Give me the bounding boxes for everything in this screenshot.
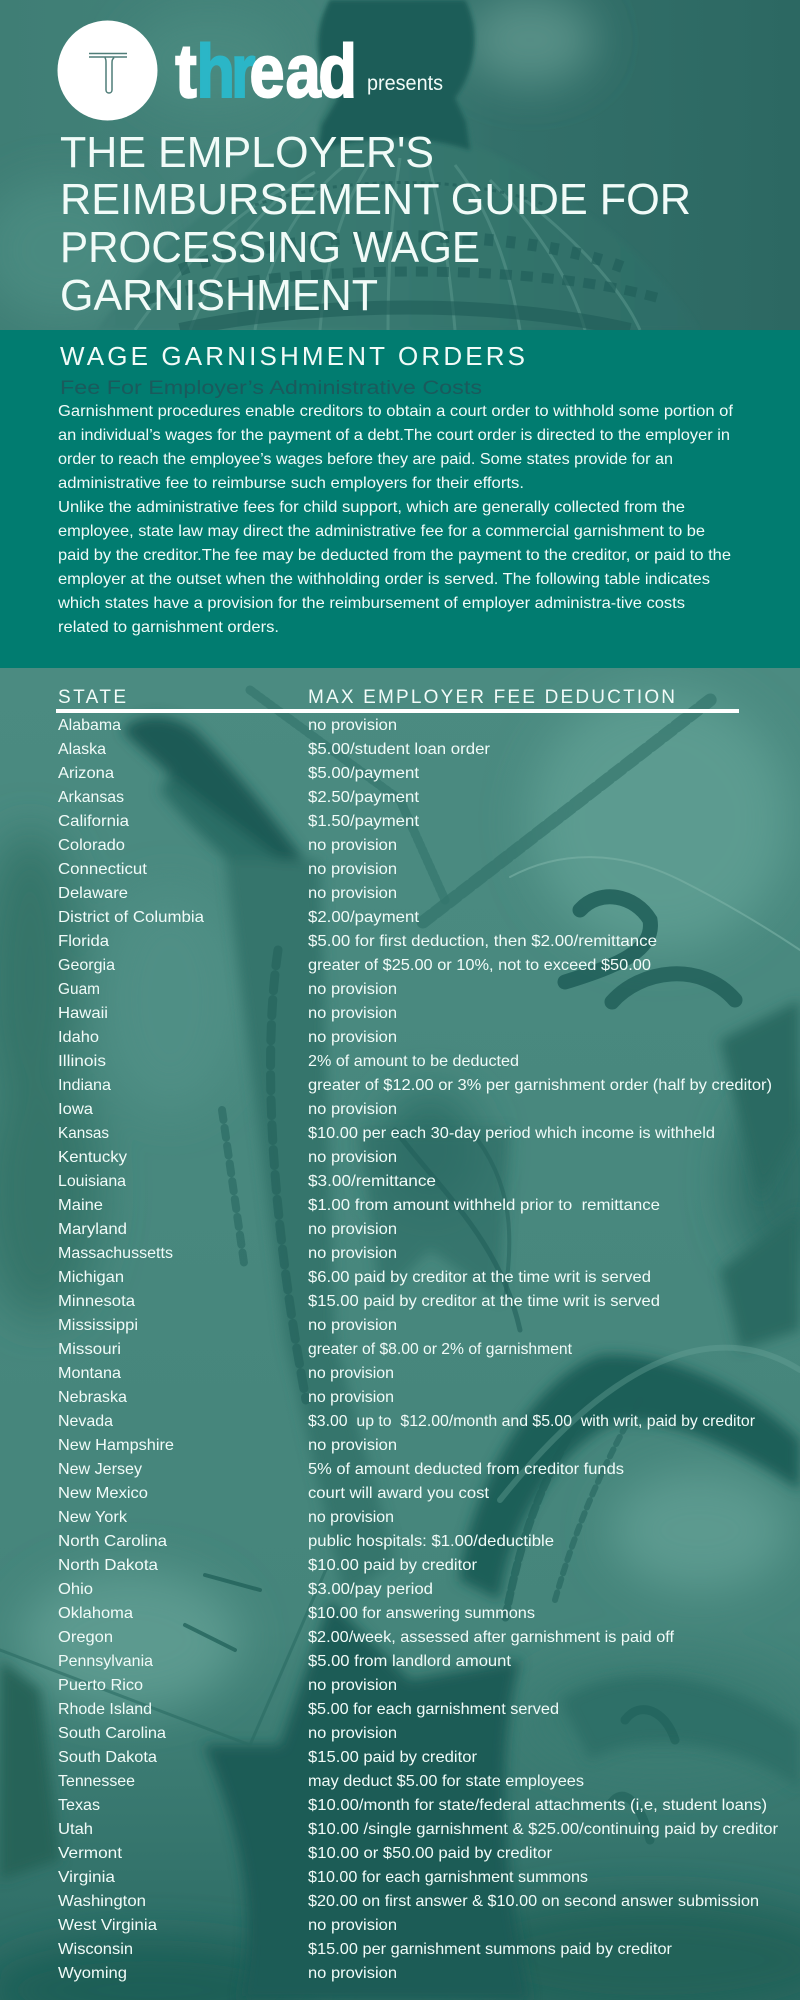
row: Florida: $5.00 for first deduction, then $2.00/remittance xyxy=(308,933,657,950)
row: Georgia: Georgia xyxy=(58,957,115,974)
row: District of Columbia: District of Columbia xyxy=(58,909,204,926)
row: Maryland: Maryland xyxy=(58,1221,127,1238)
subheading: administrative costs: Fee For Employer’s Administrative Costs xyxy=(60,378,482,399)
table header: max employer fee deduction: MAX EMPLOYER FEE DEDUCTION xyxy=(308,687,675,708)
row: Colorado xyxy=(58,837,397,854)
row: Kentucky: Kentucky xyxy=(58,1149,127,1166)
row: North Dakota: North Dakota xyxy=(58,1557,158,1574)
row: New Jersey xyxy=(58,1461,624,1478)
row: Maine: Maine xyxy=(58,1197,103,1214)
row: Colorado: no provision xyxy=(308,837,397,854)
row: Delaware xyxy=(58,885,397,902)
intro text block: Garnishment procedures enable creditors to obtain a court order to withhold some portion of xyxy=(58,403,734,420)
row: Nebraska xyxy=(58,1389,394,1406)
row: Alabama: no provision xyxy=(308,717,397,734)
intro text block: order to reach the employee’s wages before they are paid. Some states provide for an xyxy=(58,451,673,468)
row: Kentucky: no provision xyxy=(308,1149,397,1166)
row: Arizona xyxy=(58,765,420,782)
row: Puerto Rico: no provision xyxy=(308,1677,397,1694)
row: Wyoming: Wyoming xyxy=(58,1965,127,1982)
row: Missouri xyxy=(58,1341,573,1358)
row: Georgia xyxy=(58,957,651,974)
presents label: presents xyxy=(367,72,443,95)
intro text block: employer at the outset when the withholding order is served. The following table indicates xyxy=(58,571,710,588)
row: New Hampshire: no provision xyxy=(308,1437,397,1454)
row: Georgia: greater of $25.00 or 10%, not to exceed $50.00 xyxy=(308,957,651,974)
row: Missouri: greater of $8.00 or 2% of garnishment xyxy=(308,1341,573,1358)
row: Illinois xyxy=(58,1053,519,1070)
row: Nevada xyxy=(58,1413,756,1430)
row: New Hampshire xyxy=(58,1437,397,1454)
row: Alabama: Alabama xyxy=(58,717,121,734)
intro text block: which states have a provision for the reimbursement of employer administra-tive costs xyxy=(57,595,685,612)
row: Michigan: Michigan xyxy=(58,1269,124,1286)
row: North Carolina: public hospitals: $1.00/deductible xyxy=(308,1533,554,1550)
table: state fee rows xyxy=(58,717,779,1982)
row: Iowa: no provision xyxy=(308,1101,397,1118)
row: Iowa xyxy=(58,1101,397,1118)
title: GARNISHMENT xyxy=(60,271,378,320)
row: Vermont xyxy=(58,1845,553,1862)
row: Texas: $10.00/month for state/federal attachments (i,e, student loans) xyxy=(308,1797,767,1814)
row: Rhode Island xyxy=(58,1701,559,1718)
row: West Virginia xyxy=(58,1917,397,1934)
row: Idaho: no provision xyxy=(308,1029,397,1046)
row: Washington xyxy=(58,1893,759,1910)
row: New York: no provision xyxy=(308,1509,394,1526)
row: Minnesota: $15.00 paid by creditor at the time writ is served xyxy=(308,1293,660,1310)
row: Ohio xyxy=(58,1581,433,1598)
row: Vermont: $10.00 or $50.00 paid by creditor xyxy=(308,1845,553,1862)
intro text block: paid by the creditor.The fee may be deducted from the payment to the creditor, or paid to the xyxy=(58,547,731,564)
row: Washington: $20.00 on first answer & $10.00 on second answer submission xyxy=(308,1893,759,1910)
row: Delaware: Delaware xyxy=(58,885,128,902)
row: South Carolina xyxy=(58,1725,397,1742)
row: Kansas: $10.00 per each 30-day period which income is withheld xyxy=(308,1125,715,1142)
row: Utah xyxy=(58,1821,779,1838)
row: Arkansas: $2.50/payment xyxy=(308,789,420,806)
row: Alaska: Alaska xyxy=(58,741,106,758)
row: Arkansas: Arkansas xyxy=(58,789,124,806)
thread wordmark: e xyxy=(249,29,285,113)
row: Missouri: Missouri xyxy=(58,1341,121,1358)
row: Kansas: Kansas xyxy=(58,1125,109,1142)
row: Maine: $1.00 from amount withheld prior to remittance xyxy=(308,1197,660,1214)
row: New Jersey: New Jersey xyxy=(58,1461,142,1478)
intro text block: employee, state law may direct the administrative fee for a commercial garnishment to be xyxy=(58,523,705,540)
title: THE EMPLOYER'S xyxy=(60,128,434,177)
row: Virginia xyxy=(58,1869,588,1886)
row: Florida xyxy=(58,933,657,950)
row: New York xyxy=(58,1509,394,1526)
row: Connecticut: no provision xyxy=(308,861,397,878)
row: Virginia: $10.00 for each garnishment summons xyxy=(308,1869,588,1886)
thread wordmark: r xyxy=(231,29,256,113)
row: Guam xyxy=(58,981,397,998)
thread wordmark: h xyxy=(197,29,235,113)
row: Nebraska: Nebraska xyxy=(58,1389,127,1406)
row: Puerto Rico: Puerto Rico xyxy=(58,1677,143,1694)
row: Alabama xyxy=(58,717,397,734)
table header: state: STATE xyxy=(58,687,126,708)
row: Michigan xyxy=(58,1269,651,1286)
row: New Hampshire: New Hampshire xyxy=(58,1437,174,1454)
row: Oklahoma: Oklahoma xyxy=(58,1605,133,1622)
row: South Dakota: South Dakota xyxy=(58,1749,157,1766)
row: Utah: $10.00 /single garnishment & $25.00/continuing paid by creditor xyxy=(308,1821,779,1838)
row: Montana: no provision xyxy=(308,1365,394,1382)
row: Texas: Texas xyxy=(58,1797,100,1814)
row: Wisconsin xyxy=(58,1941,673,1958)
row: Michigan: $6.00 paid by creditor at the time writ is served xyxy=(308,1269,651,1286)
row: Pennsylvania: Pennsylvania xyxy=(58,1653,153,1670)
panel: wage garnishment orders xyxy=(0,330,800,668)
row: Arizona: $5.00/payment xyxy=(308,765,420,782)
row: Wyoming: no provision xyxy=(308,1965,397,1982)
row: Oregon: $2.00/week, assessed after garnishment is paid off xyxy=(308,1629,675,1646)
thread wordmark: a xyxy=(286,29,321,113)
row: South Dakota xyxy=(58,1749,478,1766)
row: Nevada: $3.00 up to $12.00/month and $5.00 with writ, paid by creditor xyxy=(308,1413,756,1430)
row: Nebraska: no provision xyxy=(308,1389,394,1406)
row: Washington: Washington xyxy=(58,1893,146,1910)
row: Maryland: no provision xyxy=(308,1221,397,1238)
row: Louisiana: Louisiana xyxy=(58,1173,126,1190)
row: Guam: Guam xyxy=(58,981,100,998)
intro text block: related to garnishment orders. xyxy=(58,619,279,636)
row: North Dakota xyxy=(58,1557,478,1574)
row: West Virginia: no provision xyxy=(308,1917,397,1934)
thread wordmark: t xyxy=(176,29,197,113)
title: PROCESSING WAGE xyxy=(60,223,480,272)
row: Tennessee xyxy=(58,1773,584,1790)
row: Pennsylvania xyxy=(58,1653,512,1670)
row: Puerto Rico xyxy=(58,1677,397,1694)
row: Hawaii xyxy=(58,1005,397,1022)
row: Kansas xyxy=(58,1125,715,1142)
row: Indiana xyxy=(58,1077,772,1094)
thread wordmark xyxy=(176,29,357,113)
row: New Mexico xyxy=(58,1485,490,1502)
row: Indiana: greater of $12.00 or 3% per garnishment order (half by creditor) xyxy=(308,1077,772,1094)
row: Alaska: $5.00/student loan order xyxy=(308,741,491,758)
row: North Carolina xyxy=(58,1533,554,1550)
row: Massachussetts xyxy=(58,1245,397,1262)
row: Wyoming xyxy=(58,1965,397,1982)
row: Arkansas xyxy=(58,789,420,806)
row: Rhode Island: $5.00 for each garnishment served xyxy=(308,1701,559,1718)
row: Illinois: 2% of amount to be deducted xyxy=(308,1053,519,1070)
row: Oklahoma xyxy=(58,1605,535,1622)
row: New Mexico: court will award you cost xyxy=(308,1485,490,1502)
row: Idaho xyxy=(58,1029,397,1046)
row: District of Columbia xyxy=(58,909,420,926)
intro text block xyxy=(57,403,734,636)
row: Connecticut xyxy=(58,861,397,878)
row: Massachussetts: Massachussetts xyxy=(58,1245,173,1262)
row: Mississippi xyxy=(58,1317,397,1334)
row: California xyxy=(58,813,420,830)
row: Connecticut: Connecticut xyxy=(58,861,148,878)
row: Montana xyxy=(58,1365,394,1382)
row: Tennessee: Tennessee xyxy=(58,1773,135,1790)
row: Illinois: Illinois xyxy=(58,1053,106,1070)
row: Rhode Island: Rhode Island xyxy=(58,1701,152,1718)
row: Mississippi: Mississippi xyxy=(58,1317,138,1334)
row: California: $1.50/payment xyxy=(308,813,420,830)
row: New York: New York xyxy=(58,1509,128,1526)
logo circle with T icon xyxy=(58,20,158,120)
row: Arizona: Arizona xyxy=(58,765,114,782)
row: Oregon: Oregon xyxy=(58,1629,113,1646)
row: Indiana: Indiana xyxy=(58,1077,111,1094)
row: Hawaii: Hawaii xyxy=(58,1005,108,1022)
row: Alaska xyxy=(58,741,491,758)
heading: wage garnishment orders: WAGE GARNISHMENT ORDERS xyxy=(60,341,525,371)
row: Iowa: Iowa xyxy=(58,1101,93,1118)
row: Maryland xyxy=(58,1221,397,1238)
intro text block: an individual’s wages for the payment of a debt.The court order is directed to the employer in xyxy=(58,427,730,444)
row: Vermont: Vermont xyxy=(58,1845,123,1862)
row: New Jersey: 5% of amount deducted from creditor funds xyxy=(308,1461,624,1478)
row: Nevada: Nevada xyxy=(58,1413,113,1430)
intro text block: Unlike the administrative fees for child support, which are generally collected from the xyxy=(58,499,685,516)
row: South Carolina: no provision xyxy=(308,1725,397,1742)
row: Oregon xyxy=(58,1629,675,1646)
row: Louisiana: $3.00/remittance xyxy=(308,1173,436,1190)
row: Louisiana xyxy=(58,1173,436,1190)
row: Ohio: $3.00/pay period xyxy=(308,1581,433,1598)
header background: capitol dome photo xyxy=(0,0,658,330)
row: Oklahoma: $10.00 for answering summons xyxy=(308,1605,535,1622)
row: Guam: no provision xyxy=(308,981,397,998)
row: Minnesota xyxy=(58,1293,660,1310)
row: Hawaii: no provision xyxy=(308,1005,397,1022)
row: Texas xyxy=(58,1797,767,1814)
row: South Dakota: $15.00 paid by creditor xyxy=(308,1749,478,1766)
intro text block: administrative fee to reimburse such employers for their efforts. xyxy=(58,475,524,492)
row: Wisconsin: Wisconsin xyxy=(58,1941,133,1958)
row: Virginia: Virginia xyxy=(58,1869,115,1886)
row: Kentucky xyxy=(58,1149,397,1166)
row: South Carolina: South Carolina xyxy=(58,1725,166,1742)
row: West Virginia: West Virginia xyxy=(58,1917,157,1934)
row: North Dakota: $10.00 paid by creditor xyxy=(308,1557,478,1574)
table background: dollar bills photo xyxy=(0,668,800,2000)
row: Pennsylvania: $5.00 from landlord amount xyxy=(308,1653,512,1670)
row: Utah: Utah xyxy=(58,1821,93,1838)
title xyxy=(60,128,691,320)
thread wordmark: d xyxy=(318,29,357,113)
row: Maine xyxy=(58,1197,660,1214)
row: Tennessee: may deduct $5.00 for state employees xyxy=(308,1773,584,1790)
row: Ohio: Ohio xyxy=(58,1581,93,1598)
row: Delaware: no provision xyxy=(308,885,397,902)
row: Wisconsin: $15.00 per garnishment summons paid by creditor xyxy=(308,1941,673,1958)
row: Massachussetts: no provision xyxy=(308,1245,397,1262)
row: North Carolina: North Carolina xyxy=(58,1533,167,1550)
row: Montana: Montana xyxy=(58,1365,121,1382)
row: Idaho: Idaho xyxy=(58,1029,99,1046)
row: Florida: Florida xyxy=(58,933,109,950)
row: New Mexico: New Mexico xyxy=(58,1485,148,1502)
row: Colorado: Colorado xyxy=(58,837,125,854)
row: California: California xyxy=(58,813,129,830)
row: Minnesota: Minnesota xyxy=(58,1293,135,1310)
row: District of Columbia: $2.00/payment xyxy=(308,909,420,926)
row: Mississippi: no provision xyxy=(308,1317,397,1334)
title: REIMBURSEMENT GUIDE FOR xyxy=(60,175,691,224)
